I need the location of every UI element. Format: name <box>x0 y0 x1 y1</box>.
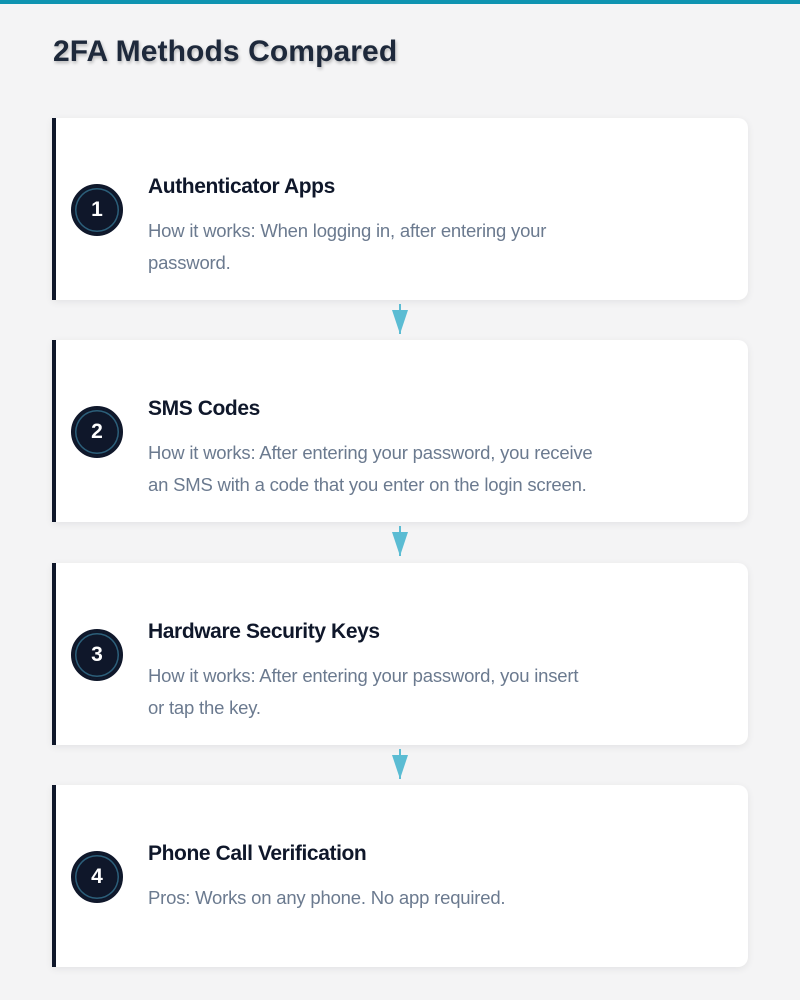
card 3: Hardware Security Keys <box>52 563 748 745</box>
badge 1: 1 <box>91 198 103 221</box>
badge 2: 2 <box>91 420 103 443</box>
card 4: Phone Call Verification <box>52 785 748 967</box>
heading 2: SMS Codes <box>148 397 260 420</box>
title: 2FA Methods Compared <box>53 35 397 68</box>
arrow 2 <box>392 526 408 556</box>
description 3: or tap the key. <box>148 697 261 718</box>
arrow 3 <box>392 749 408 779</box>
heading 4: Phone Call Verification <box>148 842 366 865</box>
description 1 <box>148 220 546 273</box>
badge 1 <box>71 184 123 236</box>
card 2: SMS Codes <box>52 340 748 522</box>
description 2 <box>148 442 592 495</box>
description 2: How it works: After entering your password, you receive <box>148 442 592 463</box>
description 1: How it works: When logging in, after entering your <box>148 220 546 241</box>
badge 3: 3 <box>91 643 103 666</box>
badge 4: 4 <box>91 865 103 888</box>
badge 4 <box>71 851 123 903</box>
description 2: an SMS with a code that you enter on the login screen. <box>148 474 587 495</box>
badge 3 <box>71 629 123 681</box>
description 4: Pros: Works on any phone. No app required. <box>148 887 505 908</box>
description 3 <box>148 665 578 718</box>
badge 2 <box>71 406 123 458</box>
heading 3: Hardware Security Keys <box>148 620 380 643</box>
description 1: password. <box>148 252 231 273</box>
card 1: Authenticator Apps <box>52 118 748 300</box>
heading 1: Authenticator Apps <box>148 175 335 198</box>
description 3: How it works: After entering your password, you insert <box>148 665 578 686</box>
arrow 1 <box>392 304 408 334</box>
